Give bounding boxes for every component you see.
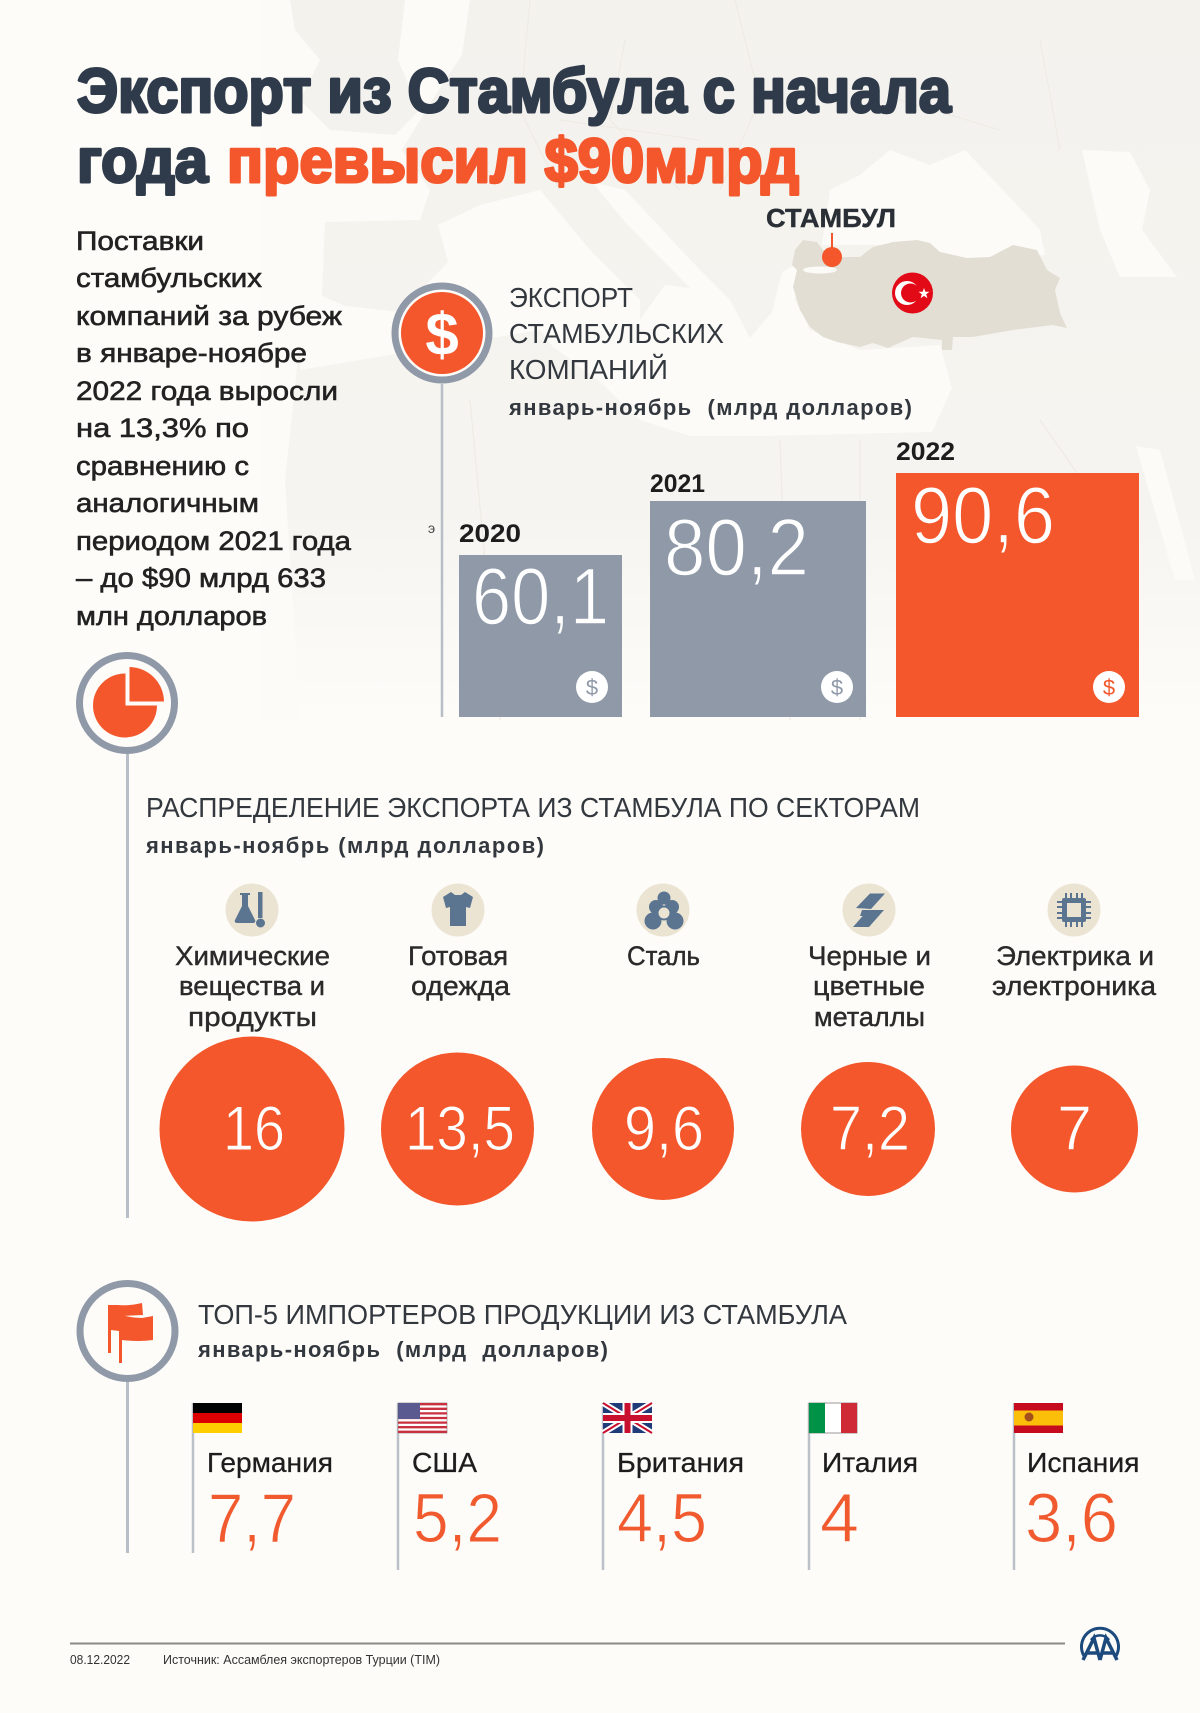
importer: Italy: Италия (822, 1447, 918, 1478)
sector labels (175, 941, 1157, 1032)
sector labels: Химические (175, 941, 330, 971)
intro text: в январе-ноябре (76, 338, 307, 368)
bar 2020: 2020 (459, 520, 521, 548)
sector icons (226, 884, 1100, 936)
bar 2020 (459, 520, 622, 717)
sector labels: продукты (188, 1002, 317, 1032)
importers heading: ТОП-5 ИМПОРТЕРОВ ПРОДУКЦИИ ИЗ СТАМБУЛА (198, 1299, 847, 1330)
importer: USA (398, 1403, 502, 1570)
sector value bubbles: 13,5 (405, 1094, 515, 1164)
bar 2022 (896, 438, 1139, 717)
intro text: аналогичным (76, 488, 259, 518)
title (77, 57, 951, 196)
title: превысил $90млрд (227, 127, 799, 196)
export section heading: ЭКСПОРТ (509, 282, 633, 313)
export section heading (508, 282, 912, 420)
intro text: млн долларов (76, 601, 267, 631)
importer: Italy (809, 1403, 918, 1570)
icon: flags (80, 1284, 175, 1378)
intro text: на 13,3% по (76, 413, 249, 443)
icon: Turkish flag (892, 272, 933, 314)
importer: Spain (1014, 1403, 1140, 1570)
text: э (428, 520, 435, 536)
bar 2022: 90,6 (911, 471, 1055, 561)
marker: Istanbul (822, 233, 842, 267)
bar 2022: $ (1103, 675, 1115, 700)
intro text: 2022 года выросли (76, 376, 338, 406)
intro text (76, 226, 352, 631)
importer: Spain: Испания (1027, 1447, 1140, 1478)
bar 2021: 80,2 (664, 503, 809, 593)
sector labels: Готовая (408, 941, 508, 971)
sector labels: металлы (814, 1002, 925, 1032)
intro text: стамбульских (76, 263, 263, 293)
bar 2021 (650, 470, 866, 717)
sector labels: вещества и (179, 971, 325, 1001)
icon: pie chart (80, 656, 174, 750)
sector value bubbles: 7,2 (830, 1094, 910, 1164)
icon: metal beam (842, 884, 896, 936)
sectors heading (145, 792, 920, 858)
export section heading: январь-ноябрь (млрд долларов) (508, 395, 912, 420)
title: года (77, 127, 208, 196)
icon: dollar: $ (425, 301, 459, 368)
sector value bubbles: 9,6 (624, 1094, 704, 1164)
export section heading: СТАМБУЛЬСКИХ (509, 318, 724, 349)
importer: Germany (193, 1403, 333, 1557)
sector value bubbles: 16 (223, 1094, 285, 1164)
sector value bubbles: 7 (1057, 1094, 1092, 1164)
importer: USA: США (412, 1447, 477, 1478)
intro text: компаний за рубеж (76, 301, 342, 331)
sector labels: цветные (813, 971, 925, 1001)
importer: Germany: 7,7 (208, 1479, 296, 1557)
intro text: Поставки (76, 226, 204, 256)
label: Istanbul: СТАМБУЛ (766, 203, 896, 233)
footer date: 08.12.2022 (70, 1653, 130, 1667)
importers heading: январь-ноябрь (млрд долларов) (197, 1337, 608, 1362)
sector labels: Сталь (627, 941, 700, 971)
importer: Britain: 4,5 (617, 1479, 707, 1557)
importer: Spain: 3,6 (1025, 1479, 1118, 1557)
bar 2020: $ (586, 675, 598, 700)
importers heading (197, 1299, 847, 1362)
intro text: сравнению с (76, 451, 249, 481)
importer: Britain (603, 1403, 744, 1570)
intro text: – до $90 млрд 633 (76, 563, 326, 593)
bar 2022: 2022 (896, 438, 955, 466)
sector labels: Электрика и (996, 941, 1154, 971)
importer: Britain: Британия (617, 1447, 744, 1478)
sector labels: Черные и (808, 941, 931, 971)
title: Экспорт из Стамбула с начала (77, 57, 951, 126)
sector value bubbles (160, 1037, 1138, 1221)
bar 2020: 60,1 (472, 552, 609, 642)
sector labels: одежда (411, 971, 511, 1001)
sectors heading: РАСПРЕДЕЛЕНИЕ ЭКСПОРТА ИЗ СТАМБУЛА ПО СЕКТОРАМ (146, 792, 920, 823)
icon: steel pipes (636, 884, 690, 936)
importer: Italy: 4 (820, 1479, 859, 1557)
icon: chemistry flask (226, 884, 278, 936)
logo: AA (1082, 1628, 1118, 1660)
importer: Germany: Германия (207, 1447, 333, 1478)
icon: dollar (395, 286, 489, 380)
bar 2021: 2021 (650, 470, 705, 498)
Turkey map with Istanbul marker (766, 203, 1067, 350)
importer: USA: 5,2 (413, 1479, 502, 1557)
intro text: периодом 2021 года (76, 526, 352, 556)
background map (260, 0, 1200, 720)
icon: microchip (1048, 884, 1100, 936)
sectors heading: январь-ноябрь (млрд долларов) (145, 833, 544, 858)
footer source: Источник: Ассамблея экспортеров Турции (TIM) (163, 1653, 440, 1667)
bar chart: exports by year (459, 438, 1139, 717)
icon: t-shirt (432, 884, 484, 936)
sector labels: электроника (992, 971, 1157, 1001)
bar 2021: $ (831, 675, 843, 700)
export section heading: КОМПАНИЙ (509, 354, 668, 385)
